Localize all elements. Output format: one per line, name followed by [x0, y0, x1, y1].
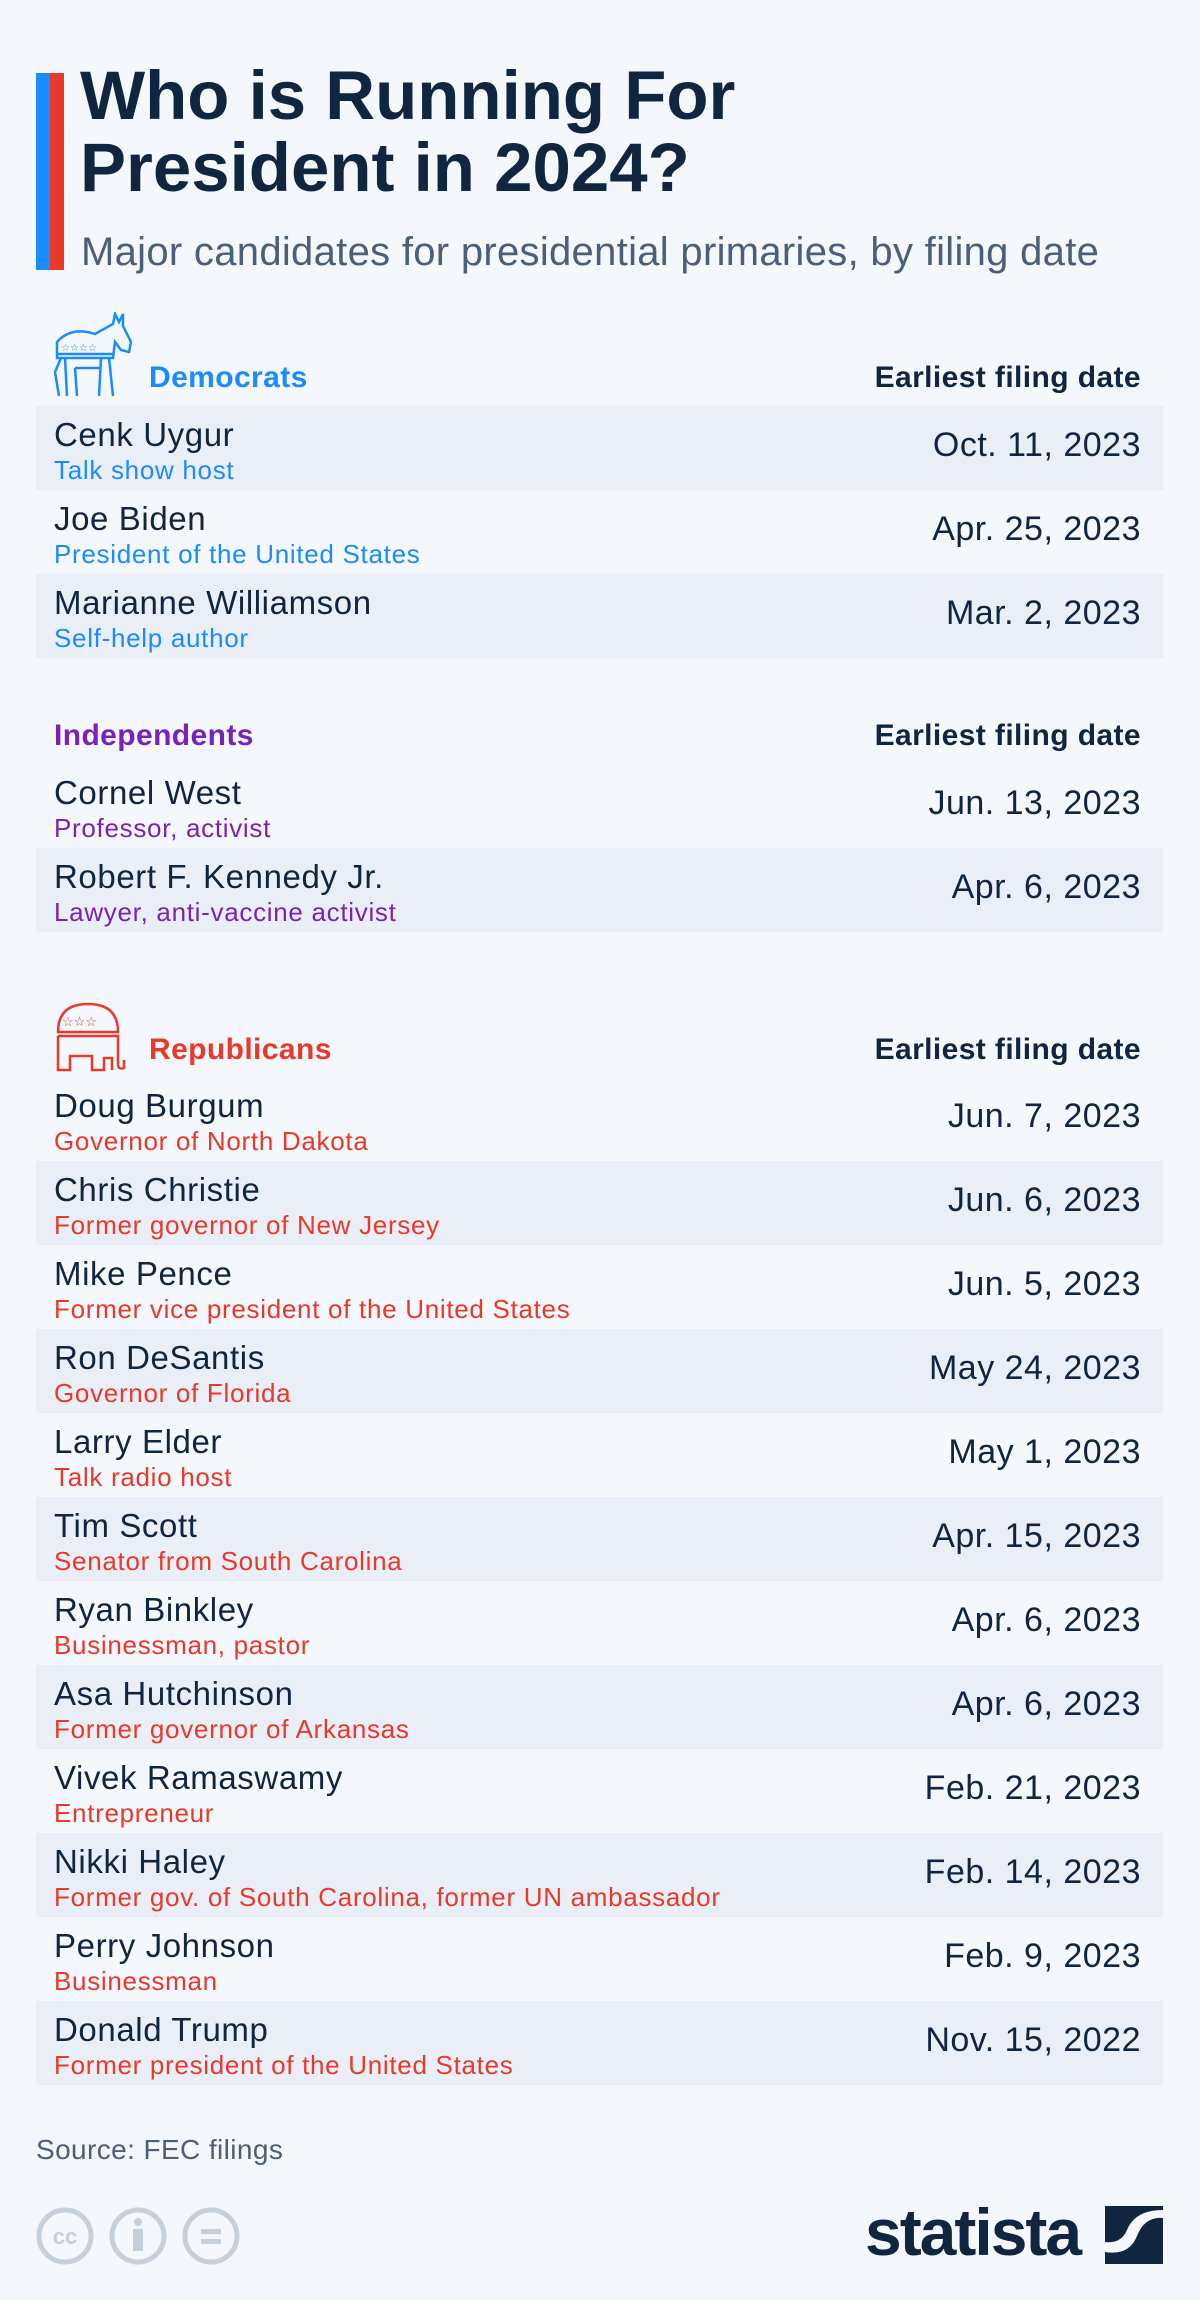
table: Democrats: Marianne Williamson	[54, 584, 372, 621]
heading: Republicans: Republicans	[149, 1033, 332, 1066]
table: Republicans: Apr. 6, 2023	[952, 1685, 1141, 1723]
header: earliest filing date (Rep): Earliest filing date	[875, 1033, 1141, 1066]
title accent bar	[36, 73, 64, 270]
table: Republicans: Ron DeSantis	[54, 1339, 265, 1376]
title	[80, 57, 735, 206]
table: Independents	[36, 774, 1163, 932]
table: Independents: Jun. 13, 2023	[928, 784, 1141, 822]
table: Republicans: Governor of Florida	[54, 1378, 291, 1408]
table: Republicans: Feb. 14, 2023	[925, 1853, 1141, 1891]
table: Democrats: Talk show host	[54, 455, 234, 485]
table: Independents: Robert F. Kennedy Jr.	[54, 858, 384, 895]
icon: donkey: ☆☆☆☆	[61, 343, 97, 354]
table: Republicans: Doug Burgum	[54, 1087, 264, 1124]
table: Republicans: May 24, 2023	[929, 1349, 1141, 1387]
subtitle: Major candidates for presidential primaries, by filing date	[81, 230, 1099, 274]
table: Republicans: Former governor of Arkansas	[54, 1714, 410, 1744]
table: Republicans: Former vice president of the United States	[54, 1294, 570, 1324]
icons: creative commons: cc	[53, 2224, 77, 2249]
table: Republicans: Governor of North Dakota	[54, 1126, 368, 1156]
table: Republicans: Nikki Haley	[54, 1843, 226, 1880]
table: Republicans: Entrepreneur	[54, 1798, 214, 1828]
table: Democrats: Self-help author	[54, 623, 249, 653]
table: Democrats: Joe Biden	[54, 500, 206, 537]
table: Democrats: Cenk Uygur	[54, 416, 234, 453]
icon: elephant: ☆☆☆	[62, 1014, 97, 1029]
source: Source: FEC filings	[36, 2134, 283, 2165]
table: Republicans: Jun. 7, 2023	[948, 1097, 1141, 1135]
table: Republicans: Businessman	[54, 1966, 218, 1996]
table: Republicans: Tim Scott	[54, 1507, 198, 1544]
table: Republicans: Chris Christie	[54, 1171, 260, 1208]
table: Republicans: Mike Pence	[54, 1255, 232, 1292]
table: Republicans: Nov. 15, 2022	[925, 2021, 1141, 2059]
icon: donkey	[54, 312, 132, 396]
table: Republicans: Feb. 9, 2023	[944, 1937, 1141, 1975]
title: President in 2024?	[80, 129, 690, 206]
header: earliest filing date (Dem): Earliest filing date	[875, 361, 1141, 394]
icons: creative commons	[36, 2208, 240, 2264]
table: Republicans: Apr. 6, 2023	[952, 1601, 1141, 1639]
table: Republicans: Former governor of New Jersey	[54, 1210, 440, 1240]
table: Democrats: Oct. 11, 2023	[933, 426, 1141, 464]
table: Republicans: Apr. 15, 2023	[932, 1517, 1141, 1555]
table: Republicans: Donald Trump	[54, 2011, 268, 2048]
table: Democrats: Mar. 2, 2023	[946, 594, 1141, 632]
table: Republicans: May 1, 2023	[948, 1433, 1141, 1471]
table: Republicans: Former gov. of South Carolina, former UN ambassador	[54, 1882, 721, 1912]
table: Republicans: Former president of the United States	[54, 2050, 513, 2080]
table: Republicans: Perry Johnson	[54, 1927, 275, 1964]
table: Republicans: Feb. 21, 2023	[925, 1769, 1141, 1807]
header: earliest filing date (Ind): Earliest filing date	[875, 719, 1141, 752]
title: Who is Running For	[80, 57, 735, 134]
table: Republicans: Businessman, pastor	[54, 1630, 310, 1660]
table: Independents: Cornel West	[54, 774, 242, 811]
table: Republicans: Ryan Binkley	[54, 1591, 254, 1628]
table: Republicans: Vivek Ramaswamy	[54, 1759, 343, 1796]
table: Republicans: Talk radio host	[54, 1462, 232, 1492]
table: Republicans	[36, 1087, 1163, 2085]
heading: Independents: Independents	[54, 719, 254, 752]
table: Republicans: Senator from South Carolina	[54, 1546, 402, 1576]
heading: Democrats: Democrats	[149, 361, 308, 394]
table: Democrats	[36, 406, 1163, 658]
table: Independents: Apr. 6, 2023	[952, 868, 1141, 906]
table: Republicans: Jun. 5, 2023	[948, 1265, 1141, 1303]
table: Republicans: Asa Hutchinson	[54, 1675, 294, 1712]
table: Republicans: Jun. 6, 2023	[948, 1181, 1141, 1219]
table: Independents: Lawyer, anti-vaccine activist	[54, 897, 397, 927]
table: Democrats: President of the United States	[54, 539, 420, 569]
table: Democrats: Apr. 25, 2023	[932, 510, 1141, 548]
table: Independents: Professor, activist	[54, 813, 271, 843]
logo: statista: statista	[865, 2195, 1080, 2269]
table: Republicans: Larry Elder	[54, 1423, 222, 1460]
icon: elephant	[56, 1002, 126, 1072]
